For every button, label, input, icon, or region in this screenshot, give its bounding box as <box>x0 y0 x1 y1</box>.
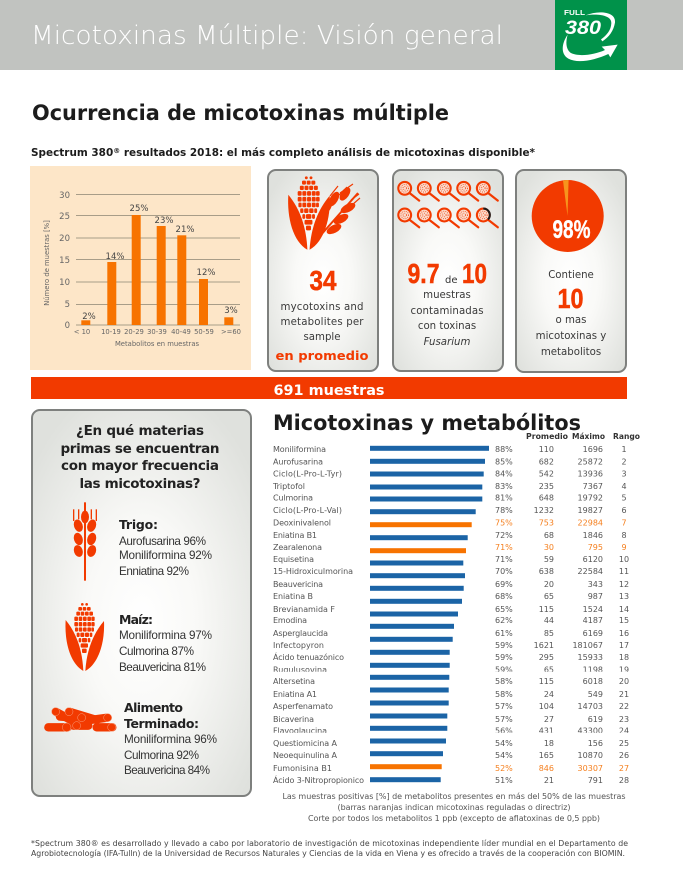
card text: muestras <box>423 290 471 301</box>
big number 9.7 de 10: 9.7 <box>408 258 440 289</box>
row: Ácido tenuazónico: 15933 <box>578 653 603 662</box>
text: finished feed: Moniliformina 96% <box>124 733 217 746</box>
bar value labels: 14% <box>106 252 124 262</box>
row: Ácido 3-Nitropropionico: Ácido 3-Nitropropionico <box>273 774 364 785</box>
text: finished feed: Terminado: <box>124 716 199 731</box>
row: Brevianamida F: 115 <box>539 605 554 614</box>
row: Zearalenona: 71% <box>495 543 513 552</box>
x axis labels: < 10 <box>74 328 90 336</box>
row: Culmorina: 648 <box>539 494 554 502</box>
footnote <box>31 839 628 858</box>
banner: 691 samples: 691 muestras <box>274 383 384 399</box>
row: Asperfenamato: 14703 <box>578 702 603 711</box>
row: Culmorina: Culmorina <box>273 494 313 502</box>
row: Altersetina: 115 <box>539 677 554 686</box>
row: Beauvericina: Beauvericina <box>273 580 323 589</box>
row: Ciclo(L-Pro-L-Val): 19827 <box>578 506 603 515</box>
row: Eniatina A1: 58% <box>495 690 513 699</box>
row: Aurofusarina <box>273 458 627 466</box>
row: Bicaverina: 23 <box>619 715 629 724</box>
row: Ácido tenuazónico: 295 <box>539 653 554 662</box>
row: Triptofol: 235 <box>539 482 554 491</box>
row: Bicaverina: 27 <box>544 715 554 724</box>
text: wheat: Trigo: <box>119 517 158 532</box>
card text: mycotoxins and <box>280 302 364 313</box>
y axis ticks: 20 <box>59 234 70 244</box>
row: Zearalenona: 30 <box>544 543 554 552</box>
bar value labels: 25% <box>130 204 148 214</box>
row: Moniliformina: 1696 <box>583 445 603 454</box>
row: Bicaverina: 619 <box>588 715 603 724</box>
row: Neoequinulina A: 54% <box>495 751 513 760</box>
table column headers: Máximo <box>572 432 605 441</box>
row: Questiomicina A: 156 <box>588 739 603 748</box>
row: Asperfenamato <box>273 700 629 711</box>
row: Eniatina A1: 21 <box>619 690 629 699</box>
table column headers: Promedio <box>526 432 568 441</box>
row: Brevianamida F: 65% <box>495 605 513 614</box>
row: Altersetina: 6018 <box>583 677 603 686</box>
text: finished feed: Alimento <box>124 700 183 715</box>
row: Eniatina A1: Eniatina A1 <box>273 690 317 699</box>
card text: metabolitos <box>541 347 601 358</box>
y axis title: Número de muestras [%] <box>43 220 51 306</box>
panel heading <box>60 423 220 492</box>
row: Neoequinulina A: 165 <box>539 751 554 760</box>
x axis labels: 40-49 <box>171 328 191 336</box>
row: Asperglaucida: 85 <box>544 629 554 638</box>
row: Asperfenamato: 104 <box>539 702 554 711</box>
y axis ticks: 30 <box>59 191 70 201</box>
card text: sample <box>303 332 341 343</box>
row: Neoequinulina A: Neoequinulina A <box>273 751 338 760</box>
y axis ticks: 10 <box>59 278 70 288</box>
row: Infectopyron: Infectopyron <box>273 641 324 650</box>
row: Rugulusovina <box>274 666 628 672</box>
bar chart: metabolites table <box>272 445 629 785</box>
text: wheat <box>119 517 212 578</box>
row: Brevianamida F: 14 <box>619 605 629 614</box>
row: Beauvericina: 343 <box>588 580 603 589</box>
row: Deoxinivalenol: 753 <box>539 518 554 528</box>
row: Ciclo(L-Pro-L-Tyr): 542 <box>539 470 554 478</box>
row: Altersetina: 58% <box>495 677 513 686</box>
row: Questiomicina A: 25 <box>619 739 629 748</box>
big number 10: 10 <box>558 283 584 314</box>
row: Triptofol: Triptofol <box>272 482 305 491</box>
row: Eniatina B1 <box>273 531 627 540</box>
row: 15-Hidroxiculmorina: 22584 <box>578 567 603 576</box>
row: Infectopyron: 1621 <box>534 641 554 650</box>
row: Rugulusovina: 19 <box>619 666 629 674</box>
card text: metabolites per <box>280 317 364 328</box>
row: Ácido tenuazónico: Ácido tenuazónico <box>273 651 344 662</box>
card text <box>410 290 484 348</box>
card text: micotoxinas y <box>536 331 606 342</box>
footnote: Agrobiotecnología (IFA-Tulln) de la Universidad de Recursos Naturales y Ciencias de la vida en Viena y es ofrecido a través de la cooperación con BIOMIN. <box>31 849 625 858</box>
row: Neoequinulina A <box>273 751 629 760</box>
row: Rugulusovina: Rugulusovina <box>273 666 327 674</box>
icon: corn <box>65 603 104 671</box>
row: Eniatina B: 68% <box>495 592 513 601</box>
row: Culmorina <box>274 494 626 502</box>
bar value labels: 12% <box>197 268 215 278</box>
row: Eniatina B: Eniatina B <box>273 592 313 601</box>
row: Eniatina B: 13 <box>619 592 629 601</box>
row: Emodina: 4187 <box>583 616 603 625</box>
row: Infectopyron: 17 <box>619 641 629 650</box>
row: Bicaverina: Bicaverina <box>273 715 314 724</box>
logo: Full 380 <box>555 0 627 70</box>
bars <box>81 215 233 325</box>
header band <box>0 0 683 70</box>
row: Moniliformina: Moniliformina <box>273 445 326 454</box>
big number 9.7 de 10: 10 <box>462 258 487 289</box>
section heading: Ocurrencia de micotoxinas múltiple <box>32 101 449 126</box>
row: Asperglaucida: Asperglaucida <box>273 629 328 638</box>
text: finished feed: Beauvericina 84% <box>124 764 210 777</box>
row: Altersetina: Altersetina <box>273 677 315 686</box>
text: wheat: Moniliformina 92% <box>119 549 212 562</box>
row: Flavoglaucina: 24 <box>619 726 629 736</box>
y axis ticks: 0 <box>65 321 70 331</box>
row: Eniatina B1: 1846 <box>583 531 603 540</box>
row: Moniliformina: 1 <box>621 445 627 454</box>
row: Equisetina <box>273 555 629 566</box>
x axis labels: 10-19 <box>101 328 121 336</box>
row: Moniliformina <box>273 445 627 454</box>
row: Equisetina: Equisetina <box>273 555 314 564</box>
icon: feed pellets <box>48 708 116 732</box>
page title: Micotoxinas Múltiple: Visión general <box>31 21 503 51</box>
row: Deoxinivalenol: Deoxinivalenol <box>273 518 331 528</box>
y axis ticks: 15 <box>59 256 70 266</box>
row: Flavoglaucina: Flavoglaucina <box>273 726 327 736</box>
text: wheat: Aurofusarina 96% <box>119 535 206 548</box>
row: Triptofol: 7367 <box>583 482 603 491</box>
row: Culmorina: 19792 <box>578 494 603 502</box>
row: Flavoglaucina: 43300 <box>578 726 603 736</box>
panel: histogram of metabolites per sample <box>30 166 251 370</box>
banner: 691 samples <box>31 377 627 399</box>
row: Ácido 3-Nitropropionico: 21 <box>544 776 554 785</box>
card text: contaminadas <box>410 306 484 317</box>
row: Brevianamida F: 1524 <box>583 605 603 614</box>
row: Moniliformina: 110 <box>539 445 554 454</box>
row: Fumonisina B1: Fumonisina B1 <box>273 764 332 773</box>
card text <box>536 317 606 355</box>
row: Infectopyron <box>273 641 629 655</box>
row: Fumonisina B1: 27 <box>619 764 629 773</box>
panel: raw materials <box>32 410 251 796</box>
text: finished feed <box>124 700 217 777</box>
row: Moniliformina: 88% <box>495 445 513 454</box>
row: Fumonisina B1: 30307 <box>578 764 603 773</box>
row: Ciclo(L-Pro-L-Tyr): 13936 <box>578 470 603 478</box>
row: Aurofusarina: 85% <box>495 458 513 466</box>
row: Emodina: Emodina <box>273 616 307 625</box>
panel heading: primas se encuentran <box>60 441 220 457</box>
row: Ciclo(L-Pro-L-Val): 1232 <box>534 506 554 515</box>
text: corn: Culmorina 87% <box>119 645 194 658</box>
row: Beauvericina: 20 <box>544 580 554 589</box>
table column headers <box>526 432 640 441</box>
icon: magnifying glasses <box>398 182 498 227</box>
text: corn <box>119 612 212 674</box>
row: Eniatina B1: Eniatina B1 <box>273 531 317 540</box>
section heading: mycotoxins and metabolites: Micotoxinas y metabólitos <box>273 411 581 436</box>
row: Emodina: 62% <box>495 616 513 625</box>
bar value labels: 2% <box>82 312 96 322</box>
row: Questiomicina A: Questiomicina A <box>273 739 338 748</box>
row: Infectopyron: 59% <box>495 641 513 650</box>
panel: 34 mycotoxins card <box>268 170 378 371</box>
row: Ácido tenuazónico <box>273 651 629 668</box>
row: Beauvericina: 12 <box>619 580 629 589</box>
y axis ticks: 5 <box>65 300 70 310</box>
row: Zearalenona: 795 <box>588 543 603 552</box>
row: Ácido 3-Nitropropionico <box>273 774 629 785</box>
row: Aurofusarina: 2 <box>621 458 627 466</box>
row: Flavoglaucina: 56% <box>495 726 513 736</box>
bar value labels <box>82 204 238 322</box>
panel: 98% contains 10 or more card <box>516 170 626 372</box>
row: Bicaverina: 57% <box>495 715 513 724</box>
card text: Fusarium <box>424 337 470 348</box>
row: Eniatina A1 <box>273 688 629 699</box>
row: 15-Hidroxiculmorina: 15-Hidroxiculmorina <box>273 567 353 576</box>
row: Eniatina B1: 72% <box>495 531 513 540</box>
row: Emodina <box>273 616 629 629</box>
row: Equisetina: 59 <box>544 555 554 564</box>
row: Beauvericina: 69% <box>495 580 513 589</box>
row: Eniatina A1: 24 <box>544 690 554 699</box>
row: Eniatina B1: 8 <box>621 531 627 540</box>
row: Aurofusarina: Aurofusarina <box>273 458 323 466</box>
chart note: Las muestras positivas [%] de metabolitos presentes en más del 50% de las muestras <box>282 792 626 801</box>
row: Eniatina B: 987 <box>588 592 603 601</box>
row: Brevianamida F: Brevianamida F <box>273 605 335 614</box>
text: wheat: Enniatina 92% <box>119 565 189 578</box>
row: Deoxinivalenol: 75% <box>495 518 513 528</box>
row: Deoxinivalenol: 22984 <box>578 518 603 528</box>
row: Ciclo(L-Pro-L-Tyr): Ciclo(L-Pro-L-Tyr) <box>273 470 342 478</box>
row: Asperfenamato: 57% <box>495 702 513 711</box>
row: Eniatina B1: 68 <box>544 531 554 540</box>
row: Emodina: 44 <box>544 616 554 625</box>
panel heading: las micotoxinas? <box>80 476 200 492</box>
row: Neoequinulina A: 26 <box>619 751 629 760</box>
row: Fumonisina B1: 52% <box>495 764 513 773</box>
row: Eniatina B: 65 <box>544 592 554 601</box>
row: Ciclo(L-Pro-L-Tyr): 3 <box>621 470 627 478</box>
row: Ácido 3-Nitropropionico: 51% <box>495 776 513 785</box>
row: Ácido tenuazónico: 59% <box>495 653 513 662</box>
card text: o más <box>556 314 586 326</box>
row: Emodina: 15 <box>619 616 629 625</box>
row: Asperglaucida <box>273 629 629 642</box>
en promedio: en promedio <box>276 348 369 363</box>
row: Ciclo(L-Pro-L-Val) <box>273 506 627 515</box>
row: Ácido tenuazónico: 18 <box>619 653 629 662</box>
row: Ciclo(L-Pro-L-Val): 78% <box>495 506 513 515</box>
row: Asperglaucida: 16 <box>619 629 629 638</box>
subtitle: ® <box>113 147 120 155</box>
card text <box>280 302 364 343</box>
subtitle: resultados 2018: el más completo análisis de micotoxinas disponible* <box>120 147 536 159</box>
row: Rugulusovina: 65 <box>544 666 554 674</box>
row: Questiomicina A: 18 <box>544 739 554 748</box>
big number 9.7 de 10 <box>408 258 487 289</box>
row: Triptofol: 4 <box>621 482 627 491</box>
logo: Full 380: FULL <box>564 8 585 17</box>
chart note <box>282 792 626 823</box>
y axis ticks: 25 <box>59 212 70 222</box>
big number 34: 34 <box>310 265 337 296</box>
row: Beauvericina <box>273 580 629 591</box>
pie chart 98% <box>532 180 604 252</box>
text: finished feed: Culmorina 92% <box>124 749 199 762</box>
bar value labels: 21% <box>176 225 194 235</box>
row: Ciclo(L-Pro-L-Val): 6 <box>621 506 627 515</box>
row: Ácido 3-Nitropropionico: 791 <box>588 776 603 785</box>
row: Ciclo(L-Pro-L-Tyr) <box>273 470 627 478</box>
row: Questiomicina A <box>273 738 629 748</box>
table column headers: Rango <box>613 432 640 441</box>
x axis labels: 50-59 <box>194 328 214 336</box>
icon: wheat <box>72 502 98 581</box>
text: corn: Moniliformina 97% <box>119 629 212 642</box>
subtitle: Spectrum 380 <box>31 147 114 159</box>
row: 15-Hidroxiculmorina: 70% <box>495 567 513 576</box>
row: Brevianamida F <box>273 605 629 616</box>
text: corn: Beauvericina 81% <box>119 661 206 674</box>
x axis labels: 20-29 <box>124 328 144 336</box>
row: Fumonisina B1 <box>273 764 629 773</box>
row: Ciclo(L-Pro-L-Tyr): 84% <box>495 470 513 478</box>
row: Deoxinivalenol: 7 <box>621 518 627 528</box>
row: Triptofol: 83% <box>495 482 513 491</box>
card text: con toxinas <box>418 321 476 332</box>
row: Asperglaucida: 6169 <box>583 629 603 638</box>
row: Asperfenamato: Asperfenamato <box>273 702 333 711</box>
panel heading: ¿En qué materias <box>76 423 204 439</box>
row: Bicaverina <box>273 714 629 724</box>
row: 15-Hidroxiculmorina: 638 <box>539 567 554 576</box>
row: Zearalenona: Zearalenona <box>273 543 322 552</box>
row: Triptofol <box>272 482 627 491</box>
row: Culmorina: 81% <box>495 494 513 502</box>
row: Ácido 3-Nitropropionico: 28 <box>619 776 629 785</box>
row: Equisetina: 10 <box>619 555 629 564</box>
big number 9.7 de 10: de <box>445 275 458 286</box>
row: Eniatina A1: 549 <box>588 690 603 699</box>
row: 15-Hidroxiculmorina: 11 <box>619 567 629 576</box>
row: Equisetina: 71% <box>495 555 513 564</box>
row: 15-Hidroxiculmorina <box>273 567 629 578</box>
y axis ticks <box>59 191 70 331</box>
row: Culmorina: 5 <box>621 494 627 502</box>
row: Ciclo(L-Pro-L-Val): Ciclo(L-Pro-L-Val) <box>273 506 342 515</box>
row: Questiomicina A: 54% <box>495 739 513 748</box>
row: Neoequinulina A: 10870 <box>578 751 603 760</box>
text: corn: Maíz: <box>119 612 153 627</box>
row: Flavoglaucina <box>274 726 629 733</box>
x axis labels: 30-39 <box>147 328 167 336</box>
bar value labels: 23% <box>155 216 173 226</box>
row: Fumonisina B1: 846 <box>539 764 554 773</box>
row: Infectopyron: 181067 <box>572 641 603 650</box>
row: Zearalenona: 9 <box>621 543 627 552</box>
x axis labels <box>74 328 241 336</box>
row: Asperfenamato: 22 <box>619 702 629 711</box>
row: Equisetina: 6120 <box>583 555 603 564</box>
row: Rugulusovina: 59% <box>495 666 513 674</box>
x axis title: Metabolitos en muestras <box>115 340 200 348</box>
logo: Full 380: 380 <box>565 18 601 39</box>
panel heading: con mayor frecuencia <box>61 458 219 474</box>
row: Aurofusarina: 682 <box>539 458 554 466</box>
row: Aurofusarina: 25872 <box>578 458 603 466</box>
row: Altersetina: 20 <box>619 677 629 686</box>
bar value labels: 3% <box>224 306 238 316</box>
row: Altersetina <box>273 675 629 686</box>
x axis labels: >=60 <box>221 328 241 336</box>
row: Eniatina B <box>273 592 629 604</box>
panel: 9.7 de 10 samples card <box>393 170 503 371</box>
icon: corn and wheat <box>288 176 360 250</box>
row: Rugulusovina: 1198 <box>583 666 603 674</box>
row: Flavoglaucina: 431 <box>539 726 554 736</box>
contiene: Contiene <box>548 270 594 281</box>
footnote: *Spectrum 380® es desarrollado y llevado a cabo por laboratorio de investigación de micotoxinas independiente líder mundial en el Departamento de <box>31 839 628 848</box>
chart note: (barras naranjas indican micotoxinas reguladas o directriz) <box>338 803 570 812</box>
chart note: Corte por todos los metabolitos 1 ppb (excepto de aflatoxinas de 0,5 ppb) <box>308 814 600 823</box>
row: Deoxinivalenol <box>273 518 627 528</box>
row: Asperglaucida: 61% <box>495 629 513 638</box>
row: Zearalenona <box>273 543 627 553</box>
pie chart 98%: 98% <box>552 216 590 244</box>
